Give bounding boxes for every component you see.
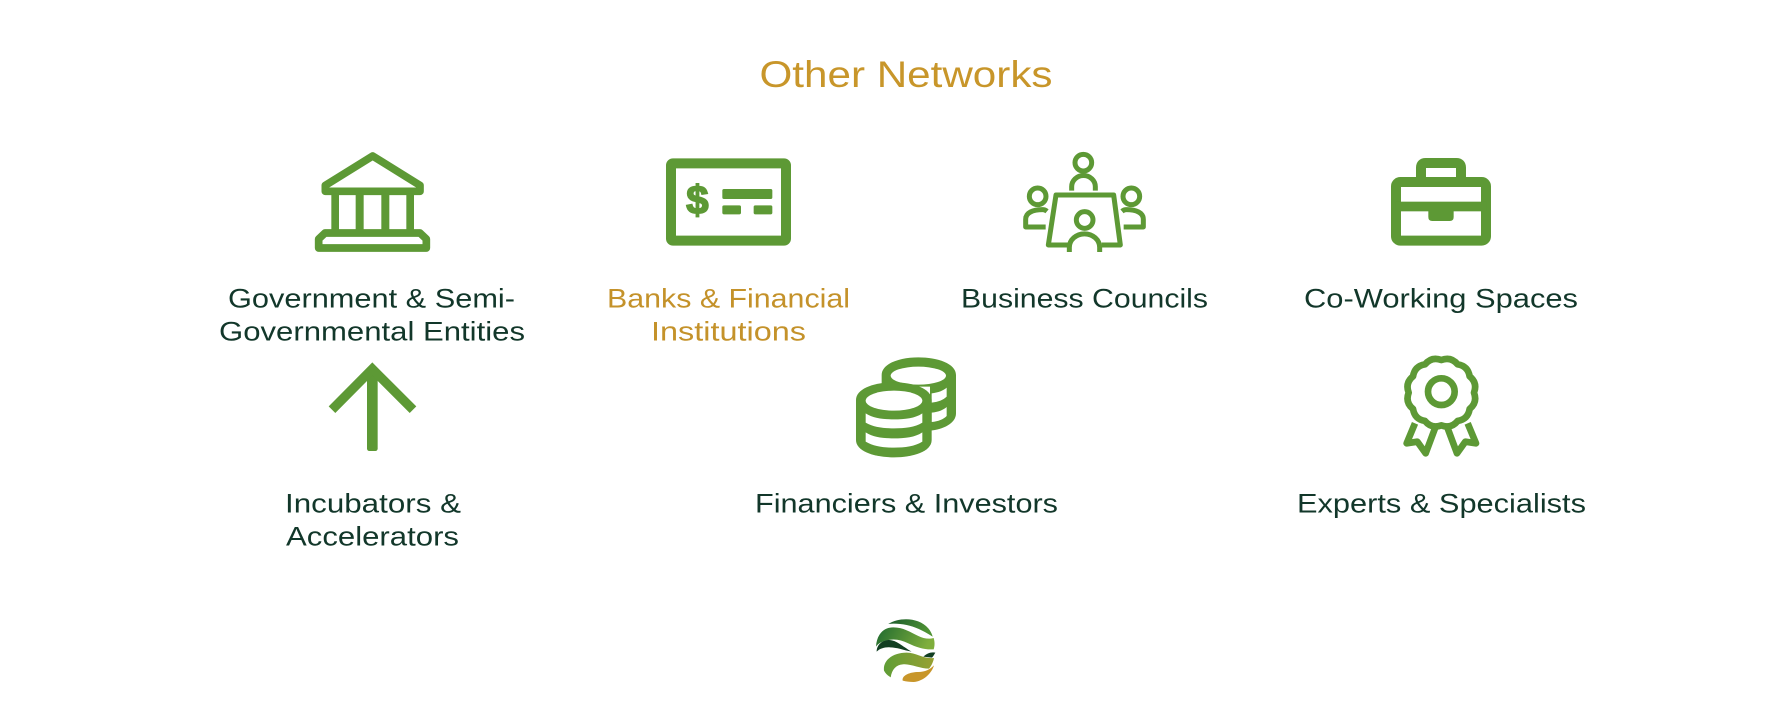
panel: business councils (961, 154, 1208, 314)
label: banks: Banks & Financial (607, 284, 850, 314)
label: government: Governmental Entities (219, 316, 525, 346)
label: co-working spaces: Co-Working Spaces (1304, 284, 1578, 314)
panel: banks (607, 163, 850, 346)
label: banks: Institutions (651, 316, 806, 346)
panel: government (219, 156, 525, 346)
label: incubators: Accelerators (286, 522, 459, 552)
label: banks (607, 284, 850, 346)
label: government (219, 284, 525, 346)
label: experts: Experts & Specialists (1297, 488, 1586, 518)
icon: government building (319, 156, 426, 248)
title: Other Networks (760, 54, 1052, 95)
panel: financiers (755, 357, 1058, 518)
icon: briefcase (1396, 163, 1486, 241)
icon: award rosette (1407, 359, 1476, 453)
panel: experts (1297, 359, 1586, 518)
icon: banknote: $ (686, 178, 708, 222)
label: government: Government & Semi- (228, 284, 515, 314)
icon: banknote (671, 163, 786, 241)
label: business councils: Business Councils (961, 284, 1208, 314)
panel: co-working spaces (1304, 163, 1578, 314)
icon: coins (856, 357, 956, 457)
label: incubators: Incubators & (285, 488, 461, 518)
label: incubators (285, 488, 461, 552)
icon: meeting table (1026, 154, 1143, 252)
label: financiers: Financiers & Investors (755, 488, 1058, 518)
panel: incubators (285, 369, 461, 552)
icon: up arrow (332, 369, 413, 451)
logo (876, 619, 935, 682)
